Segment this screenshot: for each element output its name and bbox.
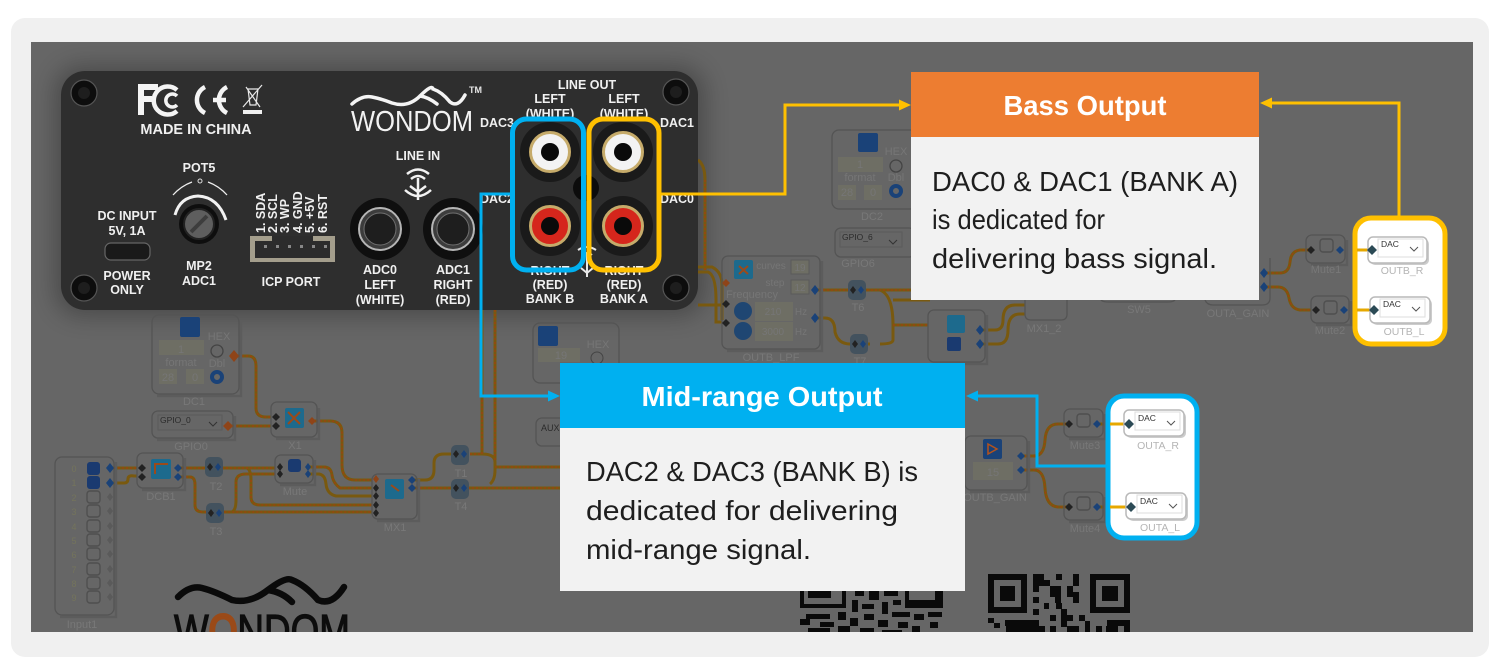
line in jacks: RIGHT [434, 278, 473, 292]
block: Mute: Mute [283, 486, 307, 498]
line in jacks: LEFT [364, 278, 396, 292]
block: OUTB_LPF: Frequency [726, 289, 778, 301]
block: DCB1: DCB1 [146, 491, 176, 503]
callout: bass output: delivering bass signal. [932, 243, 1217, 274]
block: Input1: 5 [71, 536, 77, 546]
block: GPIO6 [835, 228, 915, 270]
highlight: OUTA outputs: OUTA_L [1140, 522, 1180, 534]
blocks: T2 T3 T1 T4 T6 T7: T1 [455, 468, 467, 480]
block: DC2: Dbl [888, 172, 904, 184]
block: DC2 [832, 130, 917, 223]
block: Input1: 4 [71, 522, 77, 532]
block: DC1: format [165, 357, 197, 369]
block: DC value 19 and AUX: HEX [587, 339, 610, 351]
block: SW5 and OUTA_GAIN: SW5 [1127, 304, 1151, 316]
block: Mute [275, 455, 313, 498]
wondom logo [351, 85, 482, 138]
wondom logo (dimmed, bottom) [174, 579, 350, 657]
block: OUTB_LPF: 3000 [762, 327, 785, 338]
callout: mid-range output: mid-range signal. [586, 534, 811, 565]
highlight: OUTB outputs: DAC [1383, 299, 1401, 309]
callout: bass output: is dedicated for [932, 204, 1105, 235]
block: X1: X1 [288, 440, 302, 452]
potentiometer: POT5 [183, 161, 215, 175]
DC input: 5V, 1A [108, 224, 146, 238]
highlight: OUTA outputs: DAC [1138, 413, 1156, 423]
block: OUTB_GAIN: OUTB_GAIN [963, 492, 1027, 504]
callout: bass output [911, 72, 1259, 300]
highlight: bank A [589, 119, 659, 270]
callout: bass output: DAC0 & DAC1 (BANK A) [932, 166, 1238, 197]
highlight: OUTB outputs: OUTB_R [1381, 265, 1424, 277]
block: OUTB_LPF: 12 [794, 283, 806, 294]
block: DCB1 [137, 453, 183, 503]
blocks: T2 T3 T1 T4 T6 T7 [205, 280, 868, 538]
block: Input1: 2 [71, 493, 77, 503]
line out labels: RIGHT [531, 264, 570, 278]
line out labels: (WHITE) [526, 107, 574, 121]
block: Mute1 Mute2: Mute1 [1311, 264, 1341, 276]
DC input: POWER [103, 269, 151, 283]
block: Input1: 1 [71, 478, 77, 488]
block: Mute3 Mute4 [1064, 409, 1103, 535]
block: GPIO0: GPIO0 [174, 441, 208, 453]
block: DC1: HEX [208, 331, 231, 343]
block: Input1: 0 [71, 464, 77, 474]
block: OUTB_LPF: Hz [795, 307, 807, 318]
line out labels: (RED) [607, 278, 641, 292]
block: SW5 and OUTA_GAIN: OUTA_GAIN [1207, 308, 1269, 320]
line in jacks: (WHITE) [356, 293, 404, 307]
block: Input1: 9 [71, 593, 77, 603]
block: GPIO0 [152, 411, 233, 453]
block: DC2: format [844, 172, 876, 184]
icon: CE mark [197, 87, 227, 113]
ICP port [250, 191, 335, 289]
callout: mid-range output: Mid-range Output [642, 381, 882, 412]
highlight: OUTB outputs: DAC [1381, 239, 1399, 249]
DC input [97, 209, 157, 297]
block: DC1: 28 [162, 372, 174, 384]
block: DC1 [152, 315, 239, 408]
QR code right (clipped) [988, 574, 1130, 632]
block: DC1: Dbl [209, 358, 225, 370]
device rear panel [61, 71, 698, 310]
icon: FCC mark [141, 86, 177, 115]
block: GPIO6: GPIO6 [841, 258, 875, 270]
line out labels: LEFT [534, 92, 566, 106]
line in label and icon: LINE IN [396, 149, 440, 163]
highlight: OUTA outputs [1108, 396, 1197, 538]
line out labels: DAC1 [660, 116, 694, 130]
block: Input1: 6 [71, 550, 77, 560]
block: DC2: 0 [870, 187, 876, 199]
block: OUTB_LPF: Hz [795, 327, 807, 338]
callout: mid-range output: dedicated for delivering [586, 495, 898, 526]
ICP port: 2. SCL [266, 194, 280, 233]
block: Mute3 Mute4: Mute3 [1070, 440, 1100, 452]
block: Input1: Input1 [67, 619, 97, 631]
wondom logo: WONDOM [351, 106, 473, 138]
block: GPIO0: GPIO_0 [160, 415, 191, 425]
block: OUTB_LPF: 210 [765, 307, 782, 318]
highlight: OUTB outputs [1355, 218, 1445, 344]
RCA jacks [520, 122, 653, 256]
blocks: T2 T3 T1 T4 T6 T7: T7 [854, 356, 866, 368]
line in jacks: (RED) [436, 293, 470, 307]
block: DC value 19 and AUX: 19 [555, 350, 567, 362]
ICP port: ICP PORT [262, 275, 321, 289]
block: OUTB_GAIN: 15 [987, 467, 999, 479]
wires [110, 160, 1311, 512]
blocks: T2 T3 T1 T4 T6 T7: T4 [455, 501, 467, 513]
potentiometer: MP2 [186, 259, 212, 273]
callout: mid-range output [560, 363, 965, 591]
line out labels: DAC0 [660, 192, 694, 206]
block: X1 [271, 402, 317, 452]
DC input: ONLY [110, 283, 144, 297]
block: Input1: 7 [71, 565, 77, 575]
block: OUTB_LPF: OUTB_LPF [743, 352, 800, 364]
line out labels: DAC2 [480, 192, 514, 206]
block: DC value 19 and AUX [533, 323, 619, 446]
ICP port: 6. RST [316, 194, 330, 233]
blocks: T2 T3 T1 T4 T6 T7: T3 [210, 526, 222, 538]
highlight: OUTA outputs: DAC [1140, 496, 1158, 506]
highlight: OUTA outputs: OUTA_R [1137, 440, 1179, 452]
block: Input1: 8 [71, 579, 77, 589]
block: Mute1 Mute2 [1306, 235, 1349, 337]
block: OUTB_GAIN [963, 436, 1027, 504]
highlight: bank B [512, 119, 584, 270]
block: SW5 and OUTA_GAIN [1101, 258, 1270, 320]
line in jacks [350, 198, 483, 307]
highlight: OUTB outputs: OUTB_L [1384, 326, 1425, 338]
line in label and icon [396, 149, 440, 200]
block: DC2: DC2 [861, 211, 883, 223]
callout: bass output: Bass Output [1004, 90, 1166, 121]
signal flow diagram (dimmed) [55, 130, 1351, 631]
wondom logo: TM [469, 85, 482, 95]
line out labels: (RED) [533, 278, 567, 292]
block: Mute1 Mute2: Mute2 [1315, 325, 1345, 337]
blocks: T2 T3 T1 T4 T6 T7: T2 [210, 481, 222, 493]
arrow: bank A to bass output [659, 100, 911, 194]
line out labels: RIGHT [605, 264, 644, 278]
made in china: MADE IN CHINA [140, 122, 252, 138]
block: DC2: 28 [841, 187, 853, 199]
line out labels: LINE OUT [558, 78, 617, 92]
blocks: T2 T3 T1 T4 T6 T7: T6 [852, 302, 864, 314]
block: OUTB_LPF [722, 256, 820, 364]
block: unnamed mixer and MX1_2 [928, 300, 1067, 362]
line out labels: BANK B [526, 292, 574, 306]
ICP port: 1. SDA [254, 193, 268, 233]
QR code left (clipped) [800, 591, 943, 632]
block: Input1: 3 [71, 507, 77, 517]
block: GPIO6: GPIO_6 [842, 232, 873, 242]
block: DC2: HEX [885, 146, 908, 158]
arrow: bank B to mid-range output [481, 194, 560, 402]
line out labels: LEFT [608, 92, 640, 106]
block: DC2: 1 [857, 159, 863, 171]
block: MX1: MX1 [384, 522, 406, 534]
line out labels: DAC3 [480, 116, 514, 130]
block: DC1: 1 [178, 344, 184, 356]
block: DC1: DC1 [183, 396, 205, 408]
block: unnamed mixer and MX1_2: MX1_2 [1027, 323, 1061, 335]
arrow: OUTB to bass output [1260, 98, 1399, 217]
arrow: OUTA to mid-range output [966, 390, 1107, 466]
ICP port: 4. GND [291, 191, 305, 233]
line out labels: (WHITE) [600, 107, 648, 121]
block: Input1 [55, 457, 114, 631]
block drop shadows [60, 240, 1351, 617]
callout: mid-range output: DAC2 & DAC3 (BANK B) is [586, 456, 918, 487]
block: OUTB_LPF: 19 [794, 263, 806, 274]
block: MX1 [372, 474, 417, 534]
block: Mute3 Mute4: Mute4 [1070, 523, 1100, 535]
block: DC1: 0 [192, 372, 198, 384]
potentiometer [173, 161, 227, 288]
line out labels [480, 78, 694, 306]
DC input: DC INPUT [97, 209, 157, 223]
icon: WEEE bin [243, 85, 262, 114]
block: OUTB_LPF: curves [756, 261, 786, 272]
ICP port: 5. +5V [303, 196, 317, 233]
line in jacks: ADC0 [363, 263, 397, 277]
block: OUTB_LPF: step [766, 278, 785, 289]
ICP port: 3. WP [278, 199, 292, 233]
block: DC value 19 and AUX: AUX [541, 423, 560, 433]
mounting screws [71, 79, 689, 301]
line out labels: BANK A [600, 292, 648, 306]
line in jacks: ADC1 [436, 263, 470, 277]
potentiometer: ADC1 [182, 274, 216, 288]
